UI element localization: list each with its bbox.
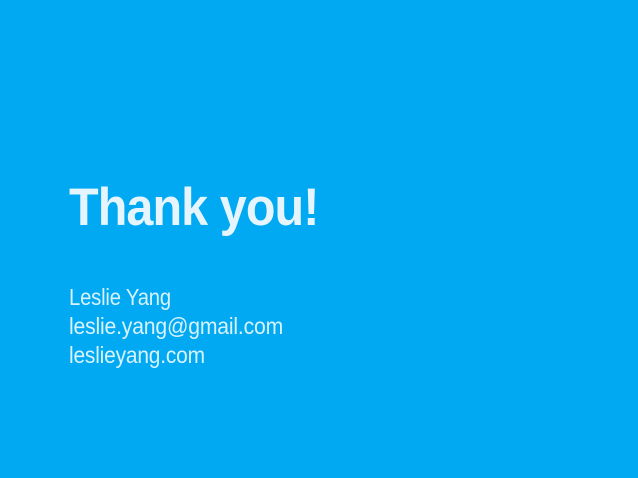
website: leslieyang.com xyxy=(69,342,205,368)
name: Leslie Yang xyxy=(69,284,171,310)
contact details xyxy=(69,284,283,368)
email: leslie.yang@gmail.com xyxy=(69,313,283,339)
title: Thank you! xyxy=(69,178,319,237)
